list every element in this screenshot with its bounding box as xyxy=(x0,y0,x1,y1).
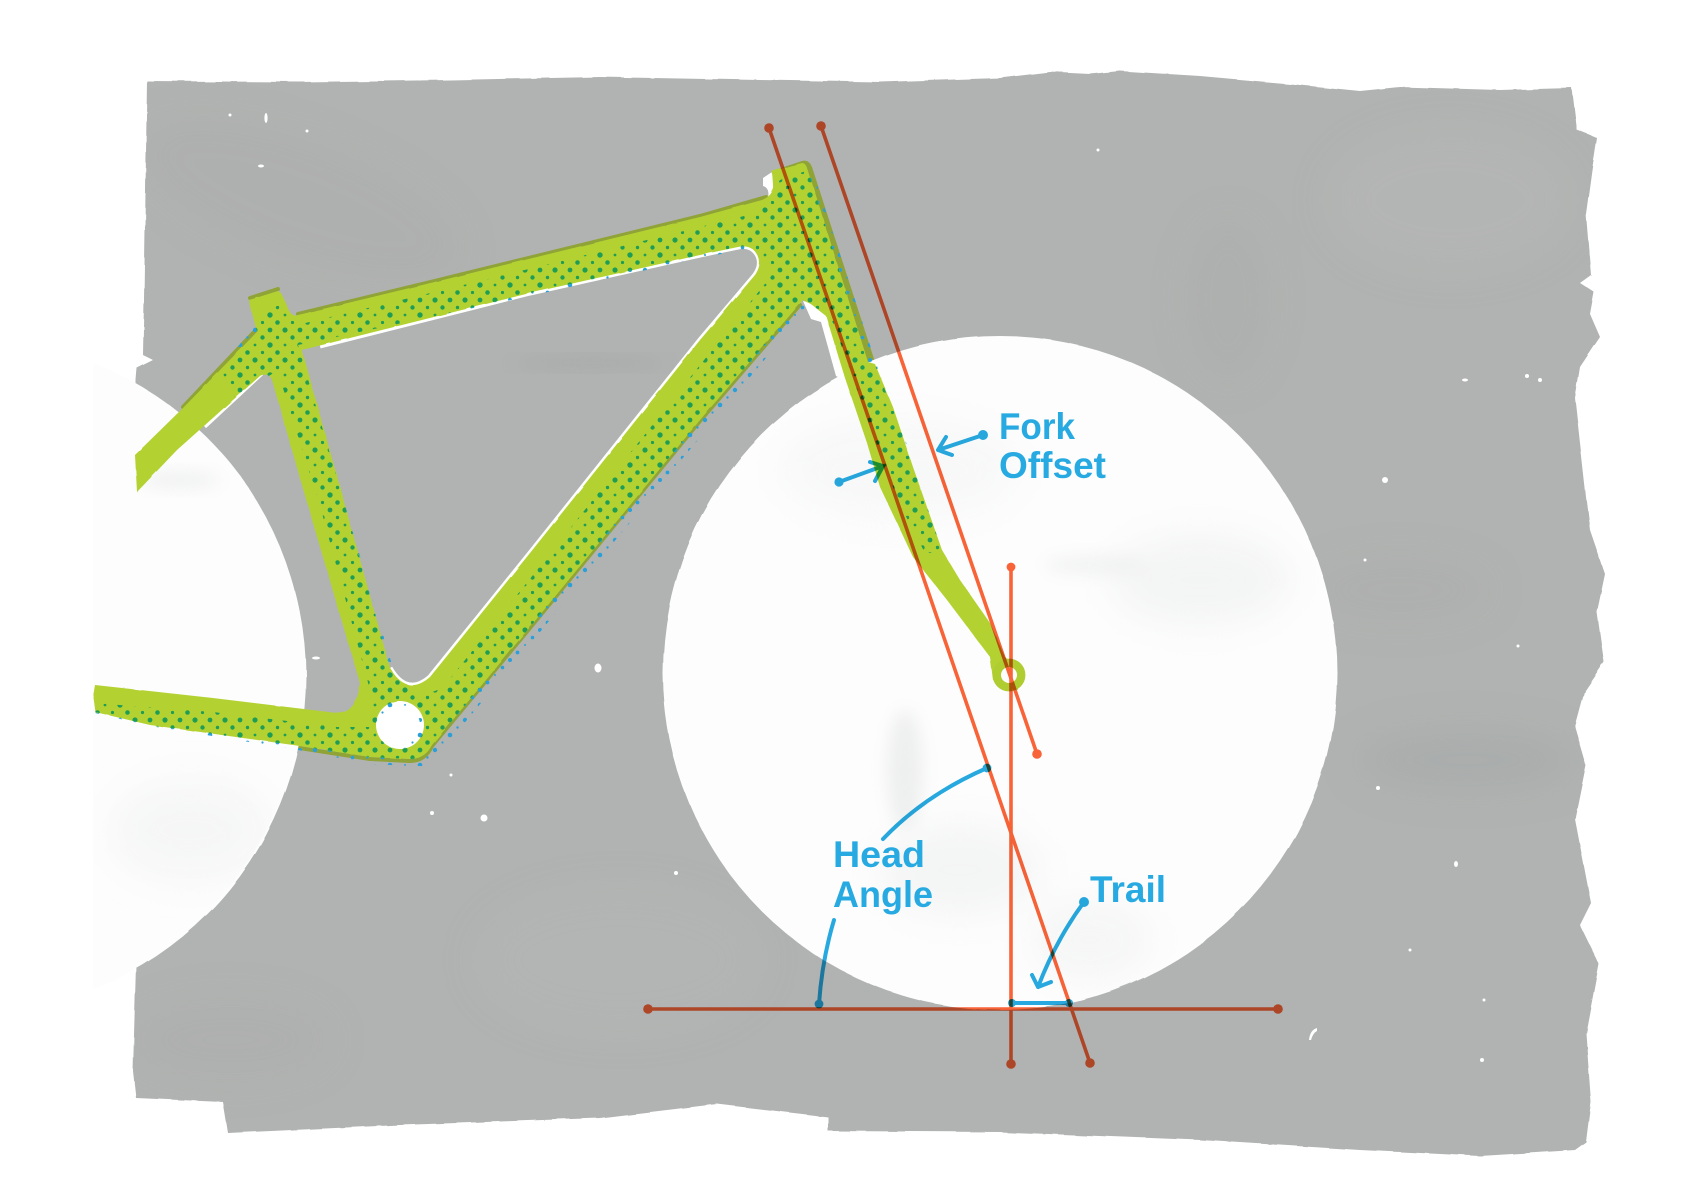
bottom bracket hole xyxy=(380,705,420,745)
label: Fork Offset: Fork xyxy=(999,406,1075,447)
label: Fork Offset xyxy=(999,406,1106,486)
lime frame tubes and fork xyxy=(93,163,1018,759)
white knockout edges xyxy=(205,172,847,750)
wheel: rear wheel xyxy=(135,383,307,968)
panel: torn grey paper xyxy=(120,71,1605,1156)
green halftone dots xyxy=(95,172,940,759)
blue halftone misregistered dots xyxy=(96,178,937,766)
arrow: trail xyxy=(1032,897,1089,987)
bar: trail distance xyxy=(1008,999,1073,1007)
arc: head angle lower xyxy=(815,920,834,1008)
label: Head Angle: Head xyxy=(833,834,925,875)
paper specks xyxy=(228,113,1542,1062)
label: Fork Offset: Offset xyxy=(999,445,1106,486)
bike frame xyxy=(80,150,1021,790)
label: Head Angle: Angle xyxy=(833,874,933,915)
arc: head angle upper xyxy=(883,764,991,839)
steering axis line xyxy=(764,123,1095,1068)
arrow: fork offset left xyxy=(834,462,883,487)
geometry lines xyxy=(643,121,1283,1069)
wheel: front wheel xyxy=(663,336,1337,1010)
arrow: fork offset right xyxy=(938,430,988,455)
label: Head Angle xyxy=(833,834,933,915)
frame shadow: olive overprint on top edges xyxy=(183,161,875,761)
vertical line through axle xyxy=(1006,563,1016,1069)
ground line xyxy=(643,1004,1283,1014)
annotations xyxy=(815,430,1089,1008)
fork offset parallel line xyxy=(816,121,1042,759)
label: Trail: Trail xyxy=(1090,869,1166,910)
fork dropout ring xyxy=(997,663,1021,687)
